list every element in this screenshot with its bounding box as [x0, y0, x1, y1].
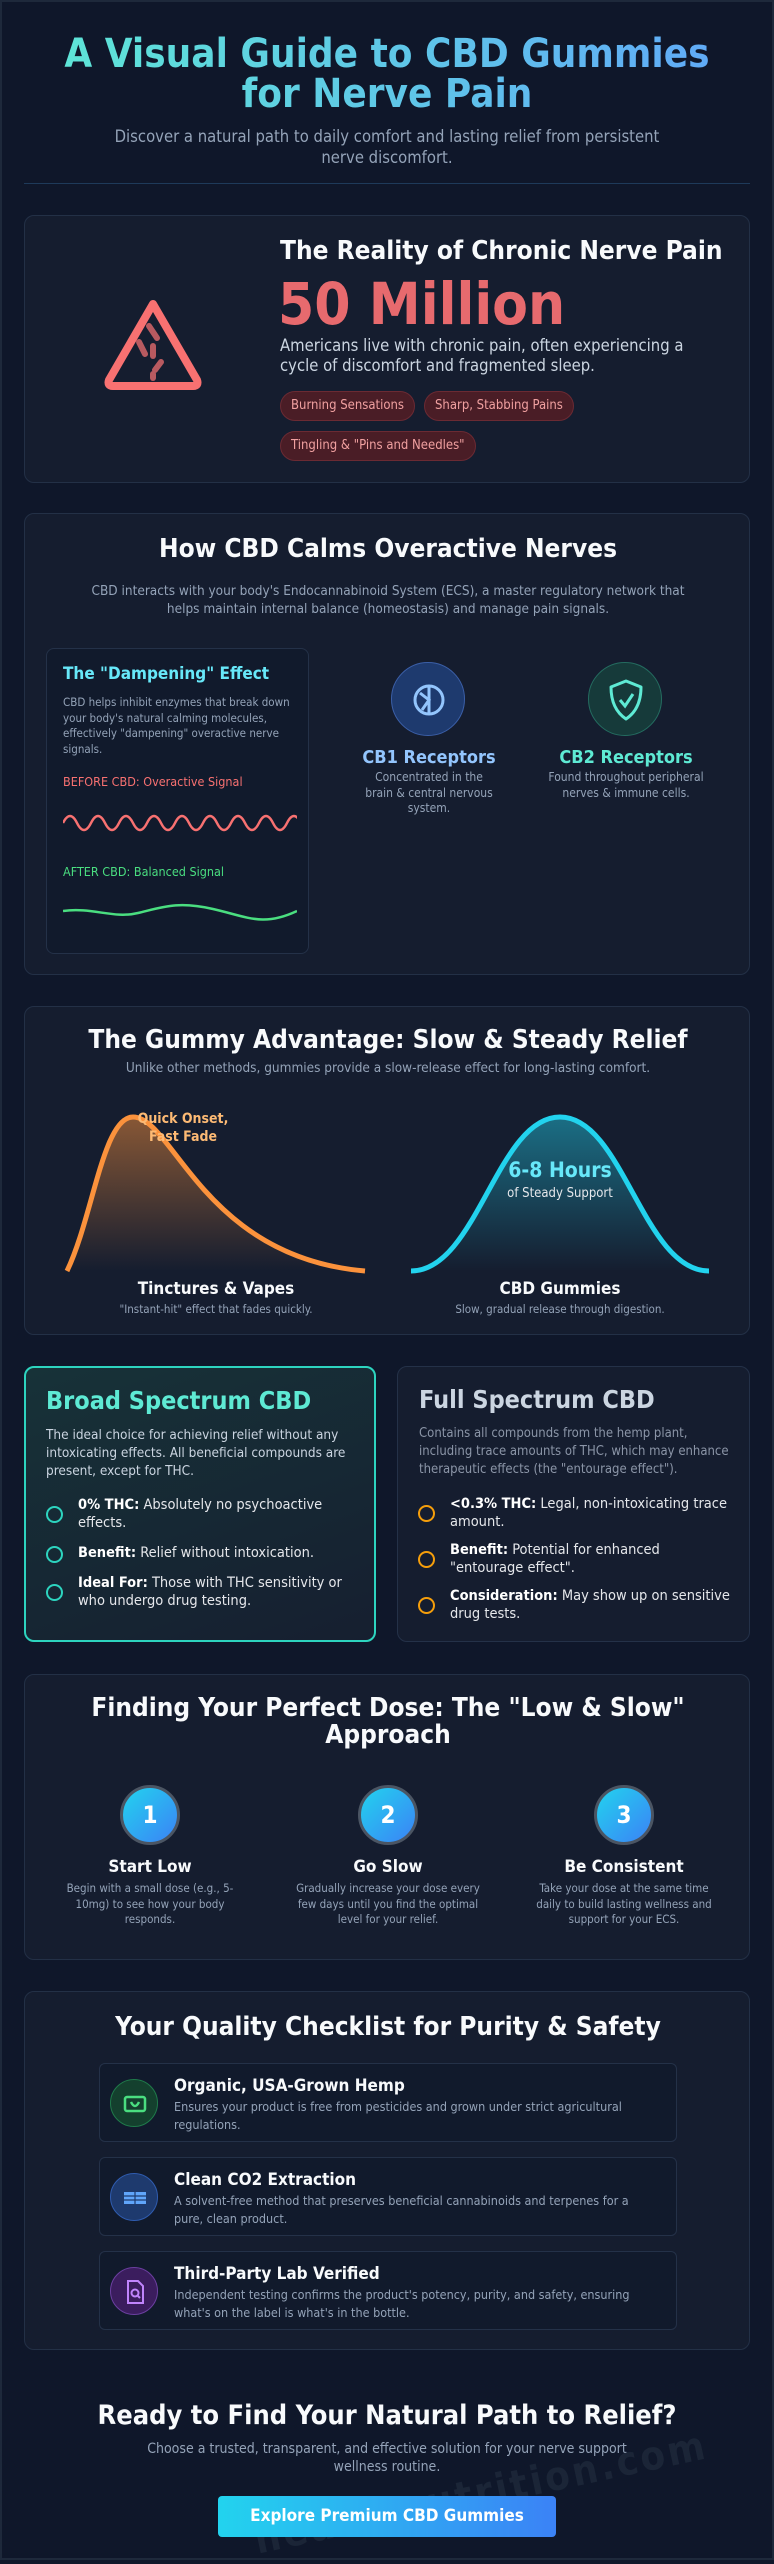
title: [0, 34, 774, 114]
panel: quality checklist: [24, 1991, 750, 2350]
step 2: Gradually increase your dose every few days until you find the optimal level for your relief.: [296, 1881, 480, 1926]
tags: [280, 391, 574, 461]
CB1: Concentrated in the brain & central nervous system.: [365, 770, 493, 815]
step 1: Begin with a small dose (e.g., 5-10mg) to see how your body responds.: [67, 1881, 233, 1926]
card: dampening: [46, 648, 309, 954]
CB2: [548, 662, 704, 800]
label: gummies: [455, 1279, 665, 1316]
tags: Sharp, Stabbing Pains: [435, 398, 563, 413]
item: lab: [99, 2251, 677, 2330]
item: organic: Ensures your product is free from pesticides and grown under strict agricultural regulations.: [174, 2099, 622, 2132]
label: tinctures: [119, 1279, 313, 1316]
icon: brain: [391, 662, 465, 736]
chart: balanced wave: [63, 904, 297, 921]
card: dampening: The "Dampening" Effect: [63, 664, 269, 684]
panel: full spectrum: Contains all compounds from the hemp plant, including trace amounts of THC, which may enhance therapeutic effects (the "entourage effect").: [419, 1426, 729, 1477]
step 2: Go Slow: [353, 1857, 423, 1877]
CTA heading: Ready to Find Your Natural Path to Relief?: [98, 2400, 676, 2431]
intro: CBD interacts with your body's Endocannabinoid System (ECS), a master regulatory network that helps maintain internal balance (homeostasis) and manage pain signals.: [91, 583, 684, 617]
step 3: Be Consistent: [564, 1857, 684, 1877]
panel: chronic pain: [24, 215, 750, 483]
panel: full spectrum: Consideration: May show up on sensitive drug tests.: [450, 1588, 730, 1622]
item: organic: Organic, USA-Grown Hemp: [174, 2076, 405, 2096]
step 1: Start Low: [108, 1857, 192, 1877]
chart: tinctures: Fast Fade: [149, 1129, 217, 1145]
panel: broad spectrum: The ideal choice for achieving relief without any intoxicating effects. All beneficial compounds are present, except for THC.: [46, 1427, 345, 1479]
heading: How CBD Calms Overactive Nerves: [159, 534, 617, 564]
card: dampening: CBD helps inhibit enzymes that break down your body's natural calming molecules, effectively "dampening" overactive nerve signals.: [63, 695, 290, 756]
item: lab: Third-Party Lab Verified: [174, 2264, 380, 2284]
title: for Nerve Pain: [242, 71, 532, 117]
panel: quality checklist: Your Quality Checklist for Purity & Safety: [115, 2012, 661, 2042]
icon: shield: [588, 662, 662, 736]
step 3: 3: [616, 1801, 632, 1829]
card: dampening: AFTER CBD: Balanced Signal: [63, 864, 224, 879]
step 3: Take your dose at the same time daily to build lasting wellness and support for your ECS.: [536, 1881, 712, 1926]
step 3: [536, 1785, 712, 1926]
tags: Burning Sensations: [291, 398, 404, 413]
item: CO2: [99, 2157, 677, 2236]
label: tinctures: Tinctures & Vapes: [138, 1279, 294, 1299]
CB1: CB1 Receptors: [362, 747, 496, 768]
step 1: [67, 1785, 233, 1926]
chart: tinctures: Quick Onset,: [138, 1111, 228, 1127]
label: gummies: Slow, gradual release through digestion.: [455, 1302, 665, 1316]
stat: 50 Million: [278, 270, 565, 338]
panel: full spectrum: Benefit: Potential for enhanced "entourage effect".: [450, 1542, 660, 1576]
panel: broad spectrum: 0% THC: Absolutely no psychoactive effects.: [78, 1497, 322, 1531]
panel: broad spectrum: Ideal For: Those with THC sensitivity or who undergo drug testing.: [78, 1575, 342, 1609]
panel: gummy advantage: [24, 1006, 750, 1335]
CTA text: Choose a trusted, transparent, and effective solution for your nerve support wellness routine.: [147, 2441, 627, 2475]
panel: broad spectrum: Benefit: Relief without intoxication.: [78, 1545, 314, 1561]
panel: broad spectrum: Broad Spectrum CBD: [46, 1386, 311, 1415]
CB2: Found throughout peripheral nerves & immune cells.: [548, 770, 704, 800]
heading: The Reality of Chronic Nerve Pain: [280, 236, 722, 266]
text: Americans live with chronic pain, often experiencing a cycle of discomfort and fragmented sleep.: [280, 336, 683, 375]
chart: gummies: 6-8 Hours: [508, 1158, 612, 1182]
subtitle: Discover a natural path to daily comfort and lasting relief from persistent nerve discomfort.: [115, 127, 659, 167]
panel: dosing: Finding Your Perfect Dose: The "Low & Slow" Approach: [91, 1693, 685, 1750]
panel: full spectrum: [397, 1366, 750, 1642]
title: A Visual Guide to CBD Gummies: [64, 31, 710, 77]
CB2: CB2 Receptors: [559, 747, 693, 768]
tags: Tingling & "Pins and Needles": [291, 438, 465, 453]
CTA button: [218, 2496, 556, 2537]
panel: gummy advantage: Unlike other methods, gummies provide a slow-release effect for long-lasting comfort.: [126, 1060, 650, 1076]
CTA button: Explore Premium CBD Gummies: [250, 2506, 524, 2526]
icon: warning triangle: [104, 300, 202, 390]
step 1: 1: [142, 1801, 158, 1829]
chart: overactive wave: [63, 814, 297, 832]
panel: full spectrum: Full Spectrum CBD: [419, 1385, 655, 1414]
label: gummies: CBD Gummies: [500, 1279, 620, 1299]
panel: dosing: [24, 1674, 750, 1960]
watermark: healthnutrition.com: [250, 2422, 712, 2564]
panel: full spectrum: <0.3% THC: Legal, non-intoxicating trace amount.: [450, 1496, 727, 1530]
chart: gummies: of Steady Support: [507, 1186, 613, 1201]
item: CO2: Clean CO2 Extraction: [174, 2170, 356, 2190]
label: tinctures: "Instant-hit" effect that fades quickly.: [119, 1302, 313, 1316]
item: lab: Independent testing confirms the product's potency, purity, and safety, ensuring what's on the label is what's in the bottle.: [174, 2287, 630, 2320]
card: dampening: BEFORE CBD: Overactive Signal: [63, 774, 243, 789]
CB1: [362, 662, 496, 815]
heading: The Gummy Advantage: Slow & Steady Relief: [88, 1025, 688, 1055]
item: CO2: A solvent-free method that preserves beneficial cannabinoids and terpenes for a pure, clean product.: [174, 2193, 629, 2226]
item: organic: [99, 2063, 677, 2142]
chart: gummies: [411, 1114, 709, 1274]
step 2: 2: [380, 1801, 396, 1829]
panel: how CBD works: [24, 513, 750, 975]
step 2: [296, 1785, 480, 1926]
panel: broad spectrum: [24, 1366, 376, 1642]
chart: tinctures: [64, 1111, 366, 1274]
